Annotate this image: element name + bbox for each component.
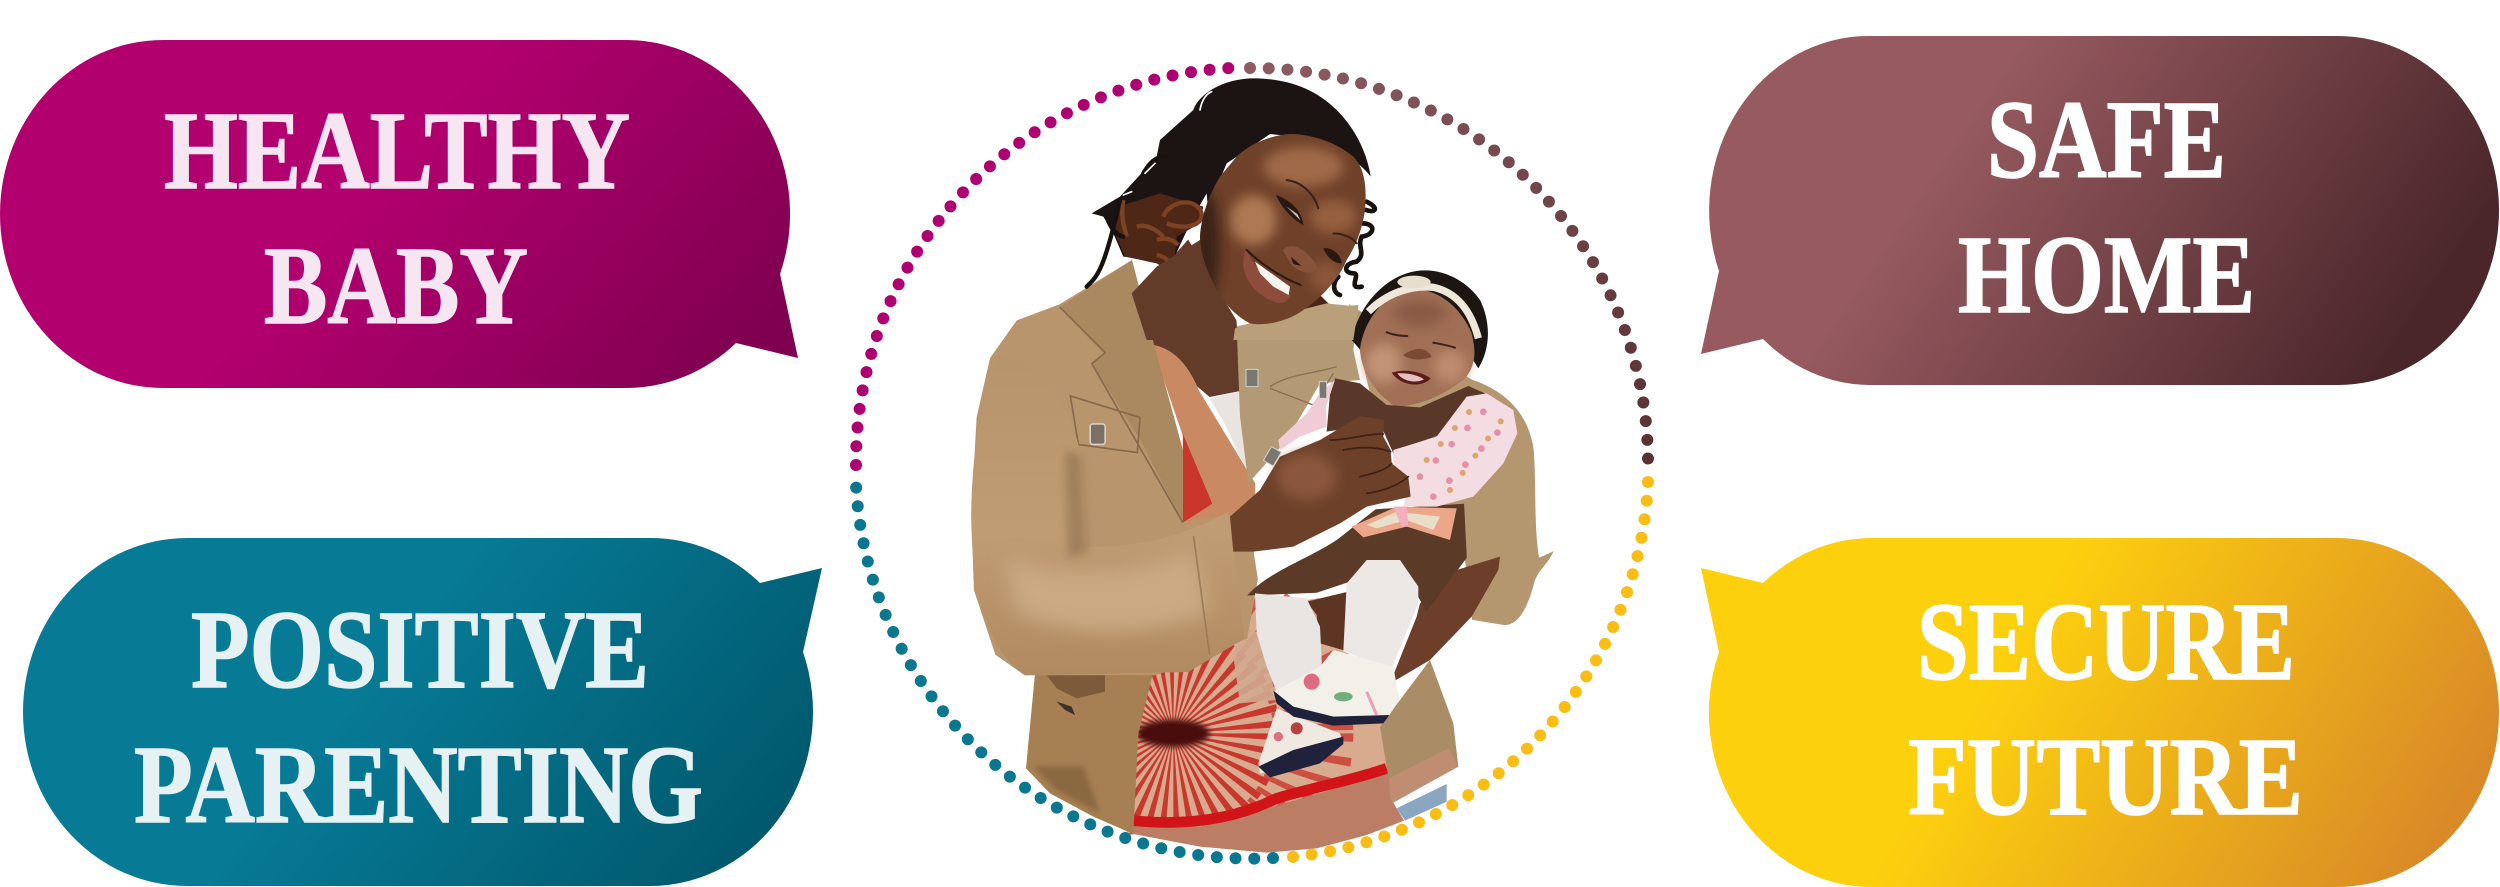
butterfly applique [1352, 507, 1457, 540]
mother's hand [1230, 416, 1411, 552]
far forearm [1393, 557, 1500, 682]
lace trim [1210, 392, 1251, 477]
bubble: positive parenting [23, 538, 822, 886]
neck [1132, 240, 1237, 340]
jacket lower left [1026, 670, 1153, 834]
near lapel [1060, 260, 1183, 542]
mother's far sleeve [1349, 304, 1554, 625]
dotted circle ring [856, 68, 1648, 859]
bubble: safe home [1701, 36, 2499, 385]
bubble: healthy baby: HEALTHY [164, 90, 630, 213]
blue jeans sliver [1397, 784, 1447, 821]
illustration: mother holding laughing baby [971, 78, 1554, 873]
bubble: healthy baby: BABY [264, 225, 528, 348]
jacket right panel and baby [1230, 270, 1517, 552]
bubble: safe home: HOME [1958, 214, 2255, 337]
baby's far sleeve [1278, 380, 1335, 450]
bubble: secure future: SECURE [1917, 581, 2295, 704]
mother's head [1087, 78, 1375, 340]
baby's headband [1368, 276, 1478, 338]
mother's lower hand [1307, 592, 1348, 652]
left brooch [1090, 424, 1105, 444]
jacket lower right [1380, 660, 1458, 803]
right dreadlocks [1334, 202, 1375, 295]
bubble: secure future: FUTURE [1908, 716, 2303, 839]
bubble: healthy baby [0, 40, 798, 388]
baby's face [1360, 289, 1474, 407]
ring arc: magenta [856, 68, 1231, 465]
baby's far leg [1255, 593, 1322, 692]
face [1193, 134, 1366, 324]
jacket torso [971, 260, 1258, 675]
collar under chin [1233, 303, 1358, 340]
bubble: safe home: SAFE [1987, 79, 2226, 202]
ring arc: brown [1250, 68, 1648, 460]
bubble: positive parenting: POSITIVE [191, 589, 649, 712]
baby's skirt [1247, 504, 1467, 612]
bubble: secure future [1701, 538, 2499, 887]
lower shoe [1258, 708, 1343, 777]
jacket brooches [1246, 369, 1327, 466]
ring arc: teal [856, 485, 1273, 859]
jacket right panel [1237, 305, 1360, 483]
upper shoe [1273, 650, 1399, 726]
baby's near leg [1343, 560, 1418, 668]
hair mass and locks [1087, 78, 1371, 287]
bubble: positive parenting: PARENTING [134, 724, 703, 847]
ring arc: yellow [1292, 482, 1648, 857]
baby's near sleeve [1393, 393, 1517, 507]
baby's dress top [1327, 378, 1485, 453]
braid under chin [1300, 295, 1330, 316]
satin top [1152, 345, 1255, 523]
legs and shoes [1255, 560, 1418, 777]
shirt hems [1133, 768, 1404, 853]
baby's hair [1352, 270, 1488, 368]
lower body layers [1026, 557, 1500, 873]
red top panel [1183, 434, 1212, 523]
patterned shirt [1127, 594, 1388, 835]
near sleeve [971, 358, 1244, 675]
upper body layers [971, 240, 1467, 675]
chest [1140, 240, 1243, 397]
